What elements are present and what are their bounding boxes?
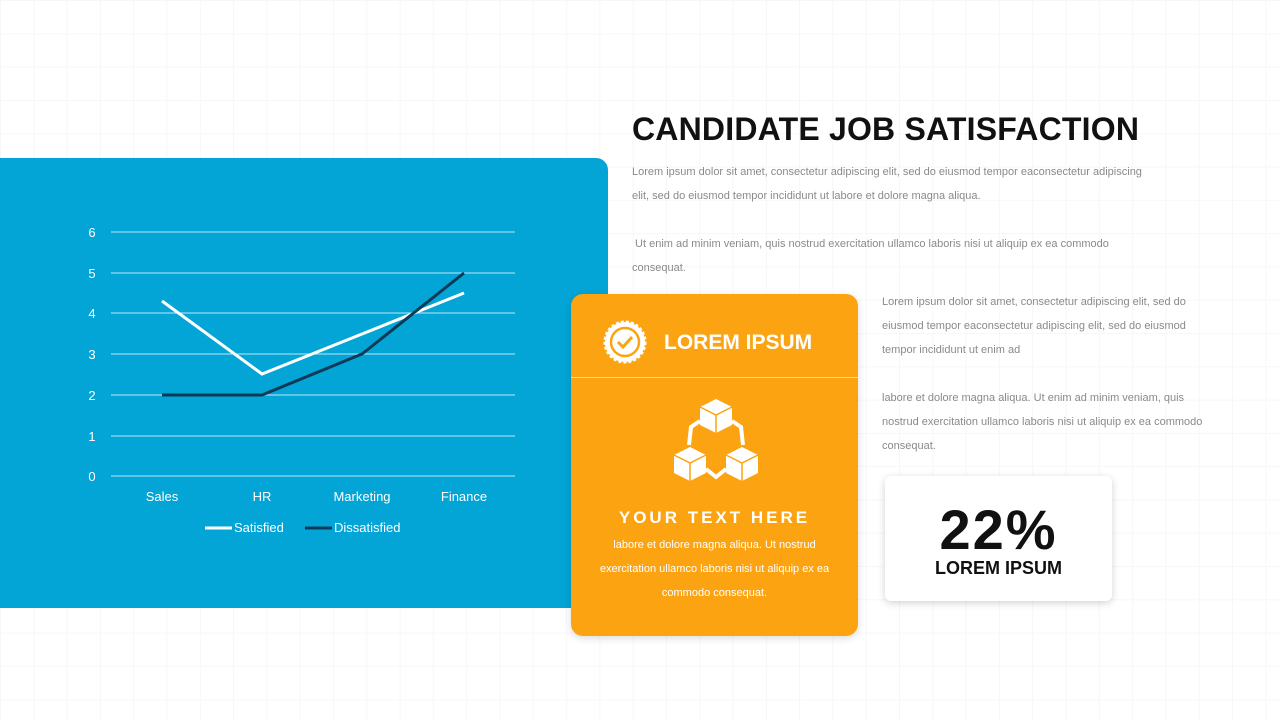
- line chart: Dissatisfied: [334, 520, 400, 535]
- title: CANDIDATE JOB SATISFACTION: [632, 111, 1139, 147]
- line chart: Finance: [441, 489, 487, 504]
- text block: right: [882, 296, 1202, 452]
- panel: chart: [0, 158, 608, 608]
- line chart: 3: [88, 347, 96, 362]
- line chart: Marketing: [333, 489, 391, 504]
- line chart: HR: [253, 489, 271, 504]
- text block: intro: Ut enim ad minim veniam, quis nostrud exercitation ullamco laboris nisi ut aliquip ex ea commodo consequat.: [632, 238, 1109, 274]
- line chart: 6: [88, 225, 96, 240]
- text block: intro: Lorem ipsum dolor sit amet, consectetur adipiscing elit, sed do eiusmod tempor eaconsectetur adipiscing elit, sed do eiusmod tempor incididunt ut labore et dolore magna aliqua.: [632, 166, 1142, 202]
- line chart: 5: [88, 266, 96, 281]
- icon: badge check: [604, 320, 646, 364]
- line chart: Satisfied: [234, 520, 284, 535]
- line chart: 0: [88, 469, 96, 484]
- card text: labore et dolore magna aliqua. Ut nostrud exercitation ullamco laboris nisi ut aliquip ex ea commodo consequat.: [600, 539, 829, 599]
- text block: intro: [632, 166, 1142, 274]
- stat card: [885, 476, 1112, 601]
- line chart: Sales: [146, 489, 179, 504]
- card subheading: YOUR TEXT HERE: [619, 508, 810, 527]
- text block: right: labore et dolore magna aliqua. Ut enim ad minim veniam, quis nostrud exercitation ullamco laboris nisi ut aliquip ex ea commodo consequat.: [882, 392, 1202, 452]
- text block: right: Lorem ipsum dolor sit amet, consectetur adipiscing elit, sed do eiusmod tempor eaconsectetur adipiscing elit, sed do eiusmod tempor incididunt ut enim ad: [882, 296, 1186, 356]
- line chart: 2: [88, 388, 96, 403]
- stat label: LOREM IPSUM: [935, 558, 1062, 578]
- line chart: 4: [88, 306, 96, 321]
- line chart: 1: [88, 429, 96, 444]
- line chart: [88, 225, 515, 535]
- panel: orange card: [571, 294, 858, 636]
- icon: cubes: [674, 399, 758, 481]
- card heading: LOREM IPSUM: [664, 331, 812, 354]
- stat value: 22%: [939, 498, 1058, 561]
